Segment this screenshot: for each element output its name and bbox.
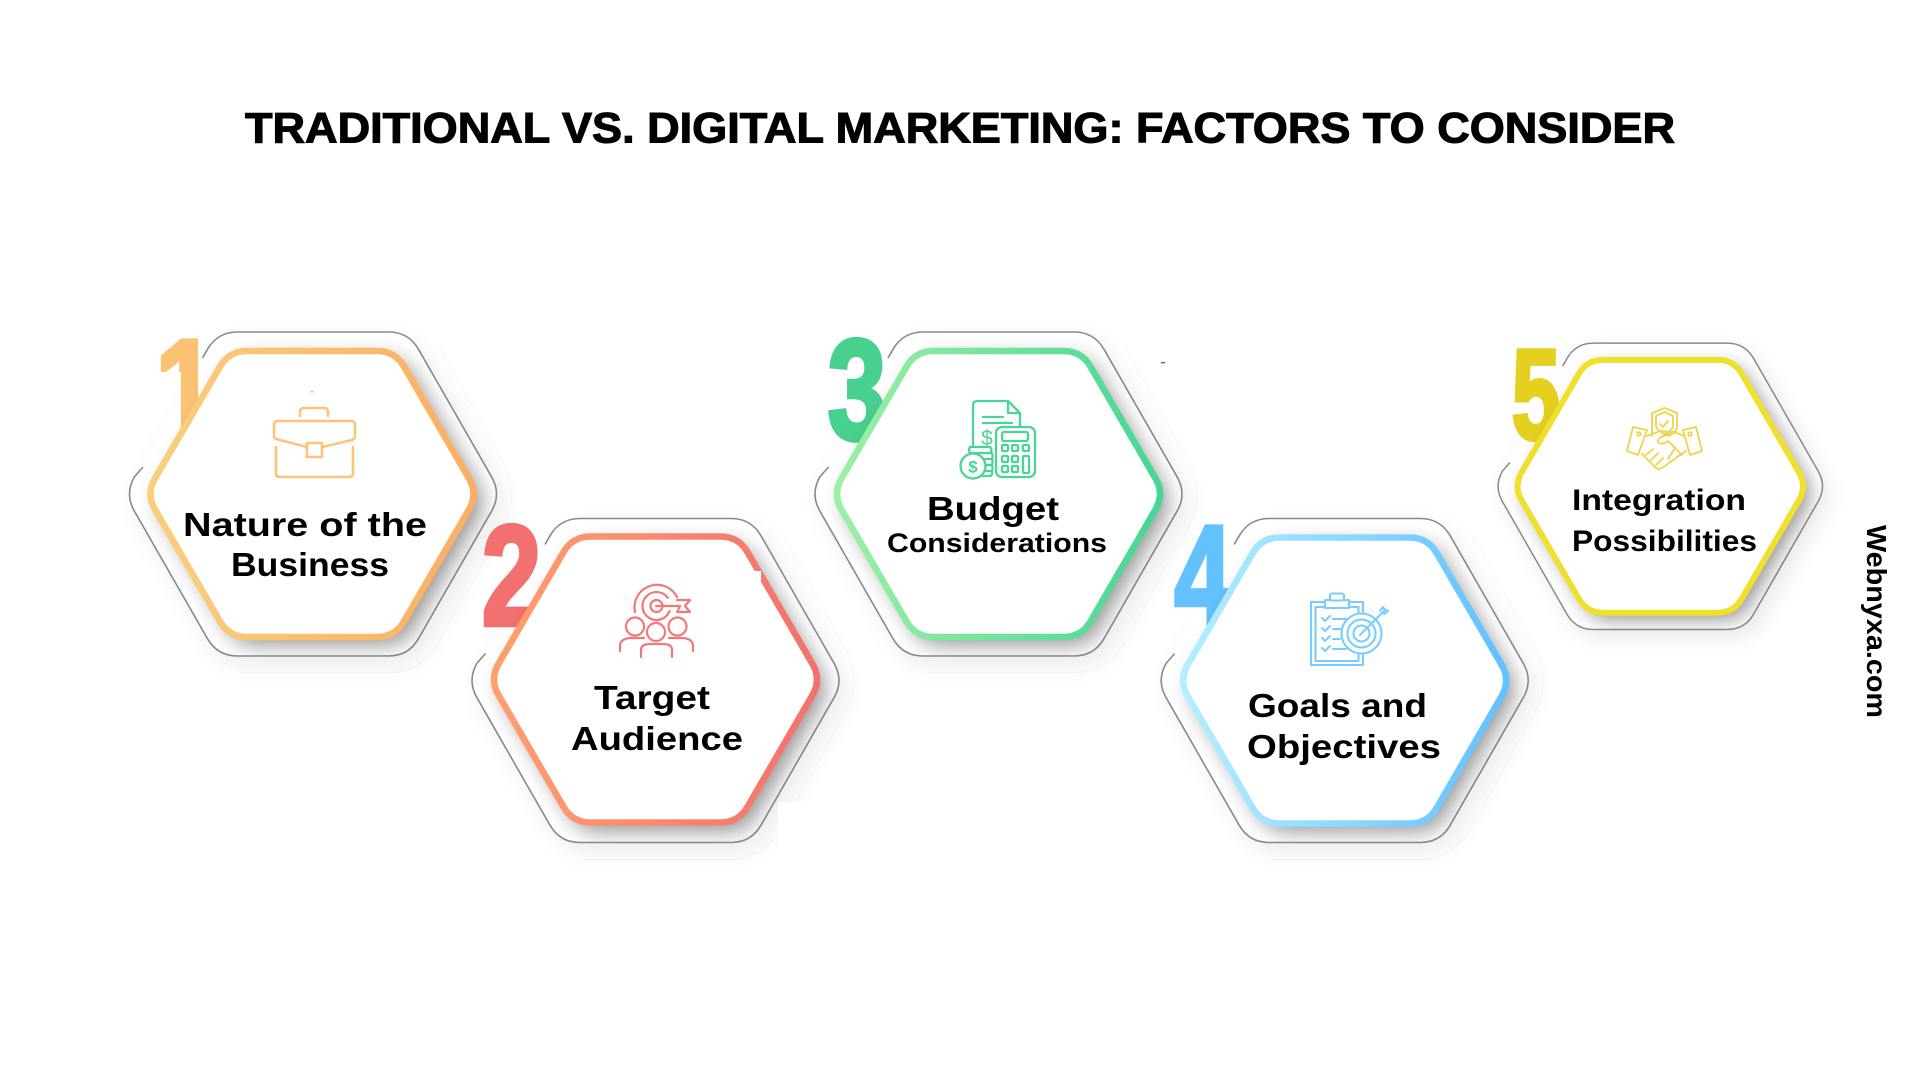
watermark: Webnyxa.com: Webnyxa.com: [1861, 525, 1892, 718]
icon: clipboard with target: [1311, 594, 1388, 665]
label: integration possibilities: [1572, 484, 1757, 558]
label: goals and objectives: [1247, 688, 1441, 766]
label: budget considerations: Budget: [927, 490, 1059, 527]
icon: handshake with shield: [1627, 408, 1702, 469]
icon: budget calculator: $: [968, 458, 978, 476]
icon: target audience: [620, 585, 693, 657]
number 5: 5: [1512, 324, 1560, 467]
title: TRADITIONAL VS. DIGITAL MARKETING: FACTORS TO CONSIDER: [245, 104, 1675, 152]
label: nature of the business: [183, 507, 427, 584]
notch on stroke: [755, 571, 761, 581]
panel: budget considerations: [815, 309, 1197, 673]
label: target audience: Audience: [571, 721, 743, 758]
label: nature of the business: Nature of the: [183, 507, 427, 544]
number 2: 2: [482, 496, 541, 656]
icon: budget calculator: $: [981, 427, 993, 450]
speck: [310, 391, 314, 392]
panel: integration possibilities: [1498, 324, 1829, 637]
label: budget considerations: [887, 490, 1107, 558]
number 4: 4: [1174, 496, 1232, 656]
icon: budget calculator: [960, 401, 1035, 478]
number 1: 1: [155, 311, 217, 470]
icon: briefcase: [274, 408, 355, 477]
white artifact patch: [778, 802, 848, 862]
label: target audience: [571, 680, 743, 758]
speck: [1161, 362, 1165, 363]
label: integration possibilities: Integration: [1572, 484, 1746, 517]
label: budget considerations: Considerations: [887, 528, 1107, 558]
label: integration possibilities: Possibilities: [1572, 525, 1757, 558]
label: nature of the business: Business: [231, 547, 389, 584]
label: goals and objectives: Objectives: [1247, 729, 1441, 766]
panel: target audience: [472, 496, 854, 862]
panel: goals and objectives: [1161, 496, 1543, 860]
panel: nature of the business: [130, 311, 512, 673]
number 3: 3: [828, 309, 886, 470]
label: target audience: Target: [594, 680, 710, 717]
label: goals and objectives: Goals and: [1248, 688, 1427, 725]
